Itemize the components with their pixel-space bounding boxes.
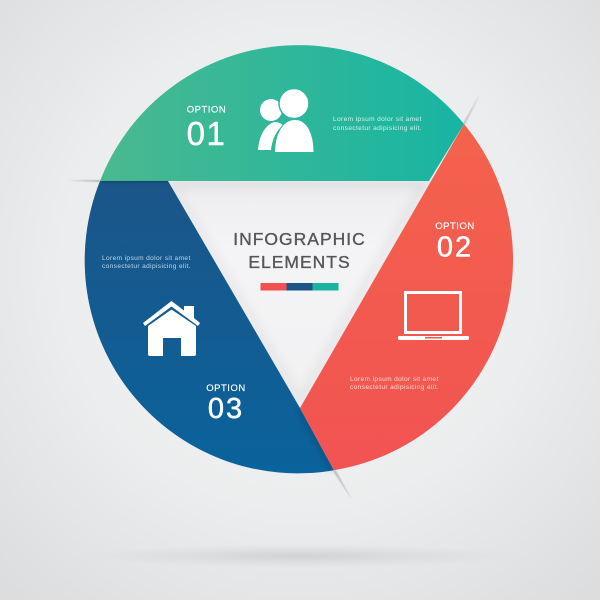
shadow on blue from red [298, 408, 334, 470]
option 03 label: OPTION [206, 383, 246, 394]
option 02 label: 02 [437, 232, 473, 264]
option 02 label [435, 221, 475, 264]
text block 03 [102, 255, 191, 270]
option 03 label: 03 [208, 393, 244, 425]
floor shadow [85, 544, 515, 568]
text block 01: Lorem ipsum dolor sit amet [333, 116, 422, 123]
fold sliver: left [68, 180, 100, 182]
option 02 label: OPTION [435, 221, 475, 232]
fold sliver: top right [463, 94, 480, 125]
option 01 label: 01 [187, 115, 226, 152]
icon: people [258, 88, 314, 152]
fold sliver: bottom [333, 470, 352, 500]
colour bar [260, 283, 338, 290]
text block 03: Lorem ipsum dolor sit amet [102, 255, 191, 262]
text block 03: consectetur adipisicing elit. [102, 263, 191, 270]
text block 01: consectetur adipisicing elit. [333, 125, 422, 132]
central triangle panel [168, 181, 429, 408]
segment 02: red [300, 124, 513, 470]
text block 02 [350, 376, 439, 391]
text block 02: consectetur adipisicing elit. [350, 384, 439, 391]
title: ELEMENTS [248, 252, 351, 272]
segment 01: green [100, 45, 464, 181]
icon: laptop [398, 292, 469, 340]
icon: house [143, 301, 200, 356]
text block 02: Lorem ipsum dolor sit amet [350, 376, 439, 383]
shadow on blue from green [102, 181, 168, 183]
panel shadows around triangle [168, 181, 429, 408]
text block 01 [333, 116, 422, 132]
segment 03: blue [85, 181, 334, 473]
option 01 label: OPTION [187, 104, 226, 116]
title: INFOGRAPHIC [233, 229, 366, 249]
title [233, 229, 366, 272]
